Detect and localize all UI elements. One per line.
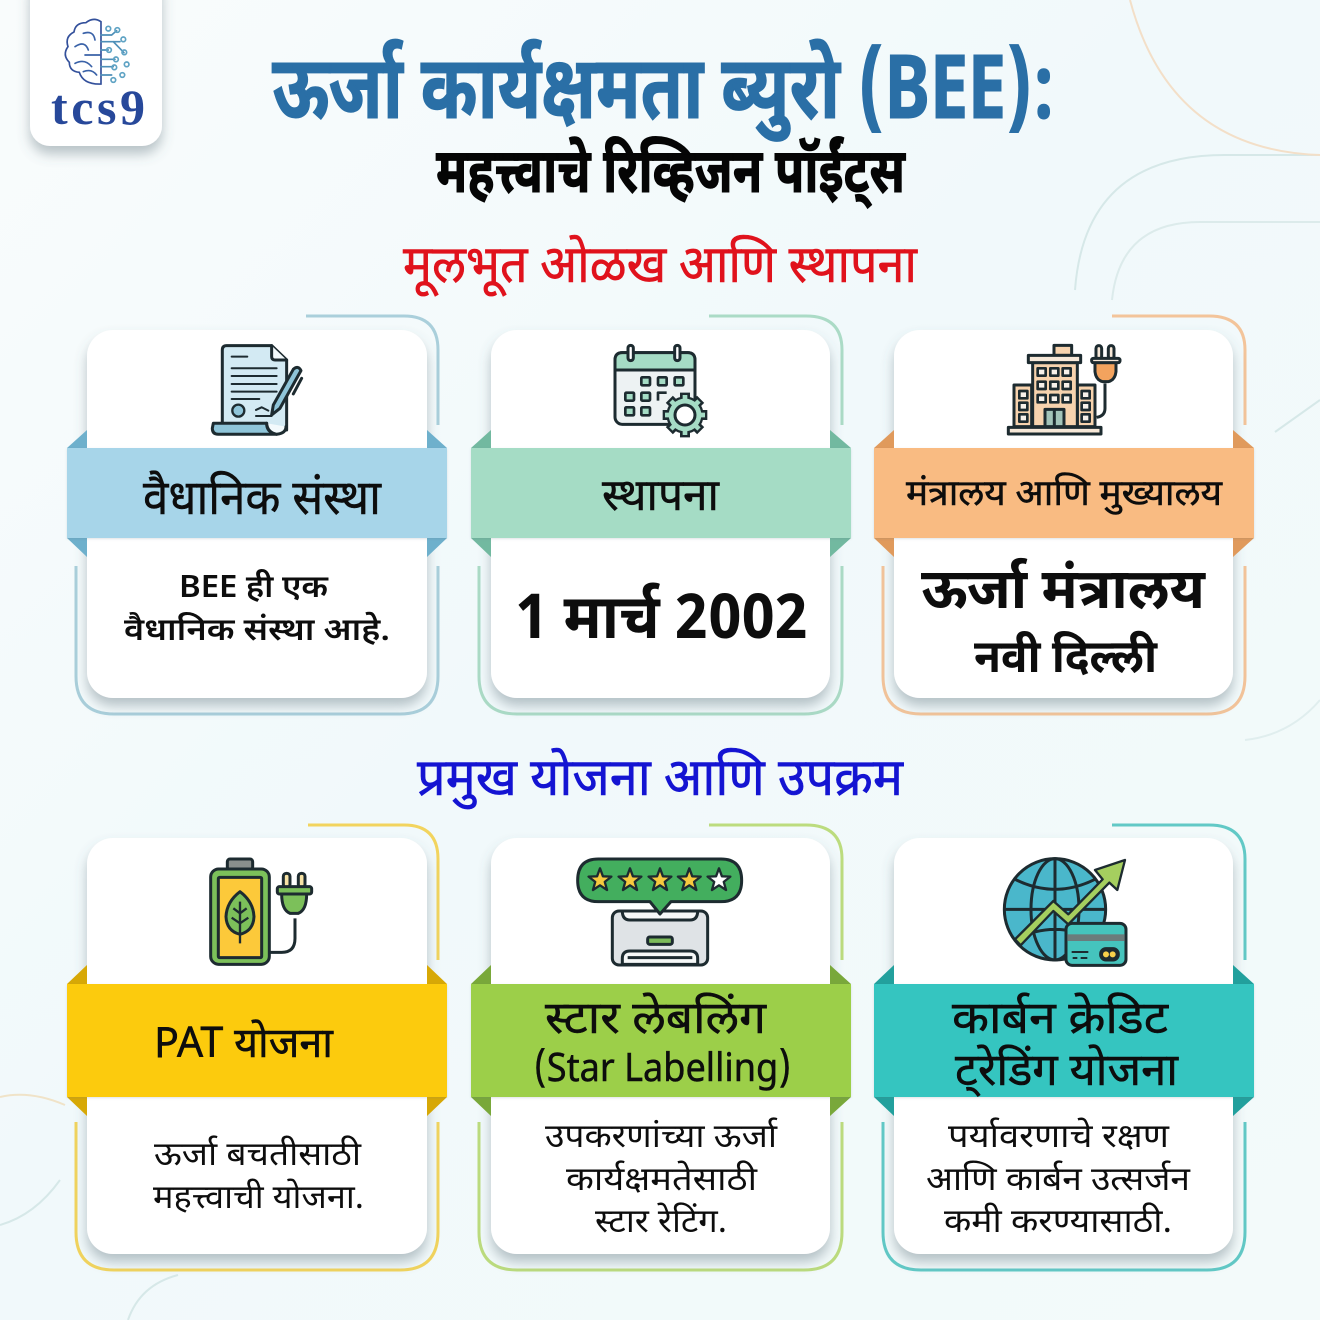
heading: कार्बन क्रेडिट: [952, 992, 1169, 1052]
panel: PAT scheme: [67, 825, 447, 1270]
heading: स्थापना: [602, 471, 721, 528]
description: ऊर्जा बचतीसाठी: [154, 1135, 363, 1179]
heading: स्टार लेबलिंग: [545, 992, 767, 1052]
description: पर्यावरणाचे रक्षण: [948, 1116, 1170, 1161]
logo badge: [30, 0, 162, 146]
description: स्टार रेटिंग.: [595, 1201, 727, 1246]
description: कार्यक्षमतेसाठी: [566, 1159, 759, 1204]
ribbon: [67, 984, 447, 1097]
icon: building with plug: [1008, 345, 1120, 434]
ribbon: [67, 448, 447, 538]
logo wordmark: tcs9: [51, 79, 145, 135]
ministry name: [921, 557, 1206, 691]
ministry name: नवी दिल्ली: [974, 630, 1158, 691]
heading: (Star Labelling): [534, 1046, 791, 1097]
icon: calendar with gear: [615, 345, 707, 437]
ministry name: ऊर्जा मंत्रालय: [921, 557, 1206, 631]
ribbon: [471, 984, 851, 1097]
description: कमी करण्यासाठी.: [944, 1202, 1172, 1246]
description: महत्त्वाची योजना.: [153, 1178, 364, 1222]
heading: [952, 992, 1179, 1104]
description: [153, 1135, 364, 1222]
section heading: schemes: प्रमुख योजना आणि उपक्रम: [417, 749, 904, 817]
description: [545, 1117, 779, 1246]
panel: establishment: [471, 316, 851, 714]
panel: statutory body: [67, 316, 447, 714]
heading: PAT योजना: [154, 1020, 334, 1075]
heading: [534, 992, 791, 1097]
ribbon: [471, 448, 851, 538]
description: आणि कार्बन उत्सर्जन: [926, 1160, 1191, 1204]
icon: document with pen: [212, 346, 302, 434]
heading: मंत्रालय आणि मुख्यालय: [906, 472, 1223, 520]
icon: rated air conditioner: [578, 859, 742, 965]
description: वैधानिक संस्था आहे.: [124, 612, 390, 653]
date: 1 मार्च 2002: [515, 582, 808, 664]
icon: brain circuit: [65, 19, 129, 84]
description: BEE ही एक: [179, 569, 329, 610]
description: [124, 569, 390, 653]
panel: ministry and headquarters: [874, 316, 1254, 714]
description: उपकरणांच्या ऊर्जा: [545, 1117, 779, 1161]
icon: eco battery with plug: [211, 859, 312, 964]
ribbon: [874, 448, 1254, 538]
subtitle: महत्त्वाचे रिव्हिजन पॉईंट्स: [436, 135, 906, 218]
section heading: foundation: मूलभूत ओळख आणि स्थापना: [403, 236, 918, 304]
panel: star labelling: [471, 825, 851, 1270]
icon: globe with arrow and card: [1004, 859, 1126, 965]
panel: carbon credit trading: [874, 825, 1254, 1270]
heading: वैधानिक संस्था: [143, 470, 382, 534]
heading: ट्रेडिंग योजना: [955, 1044, 1179, 1104]
title: ऊर्जा कार्यक्षमता ब्युरो (BEE):: [272, 39, 1055, 154]
ribbon: [874, 984, 1254, 1097]
description: [926, 1116, 1191, 1246]
